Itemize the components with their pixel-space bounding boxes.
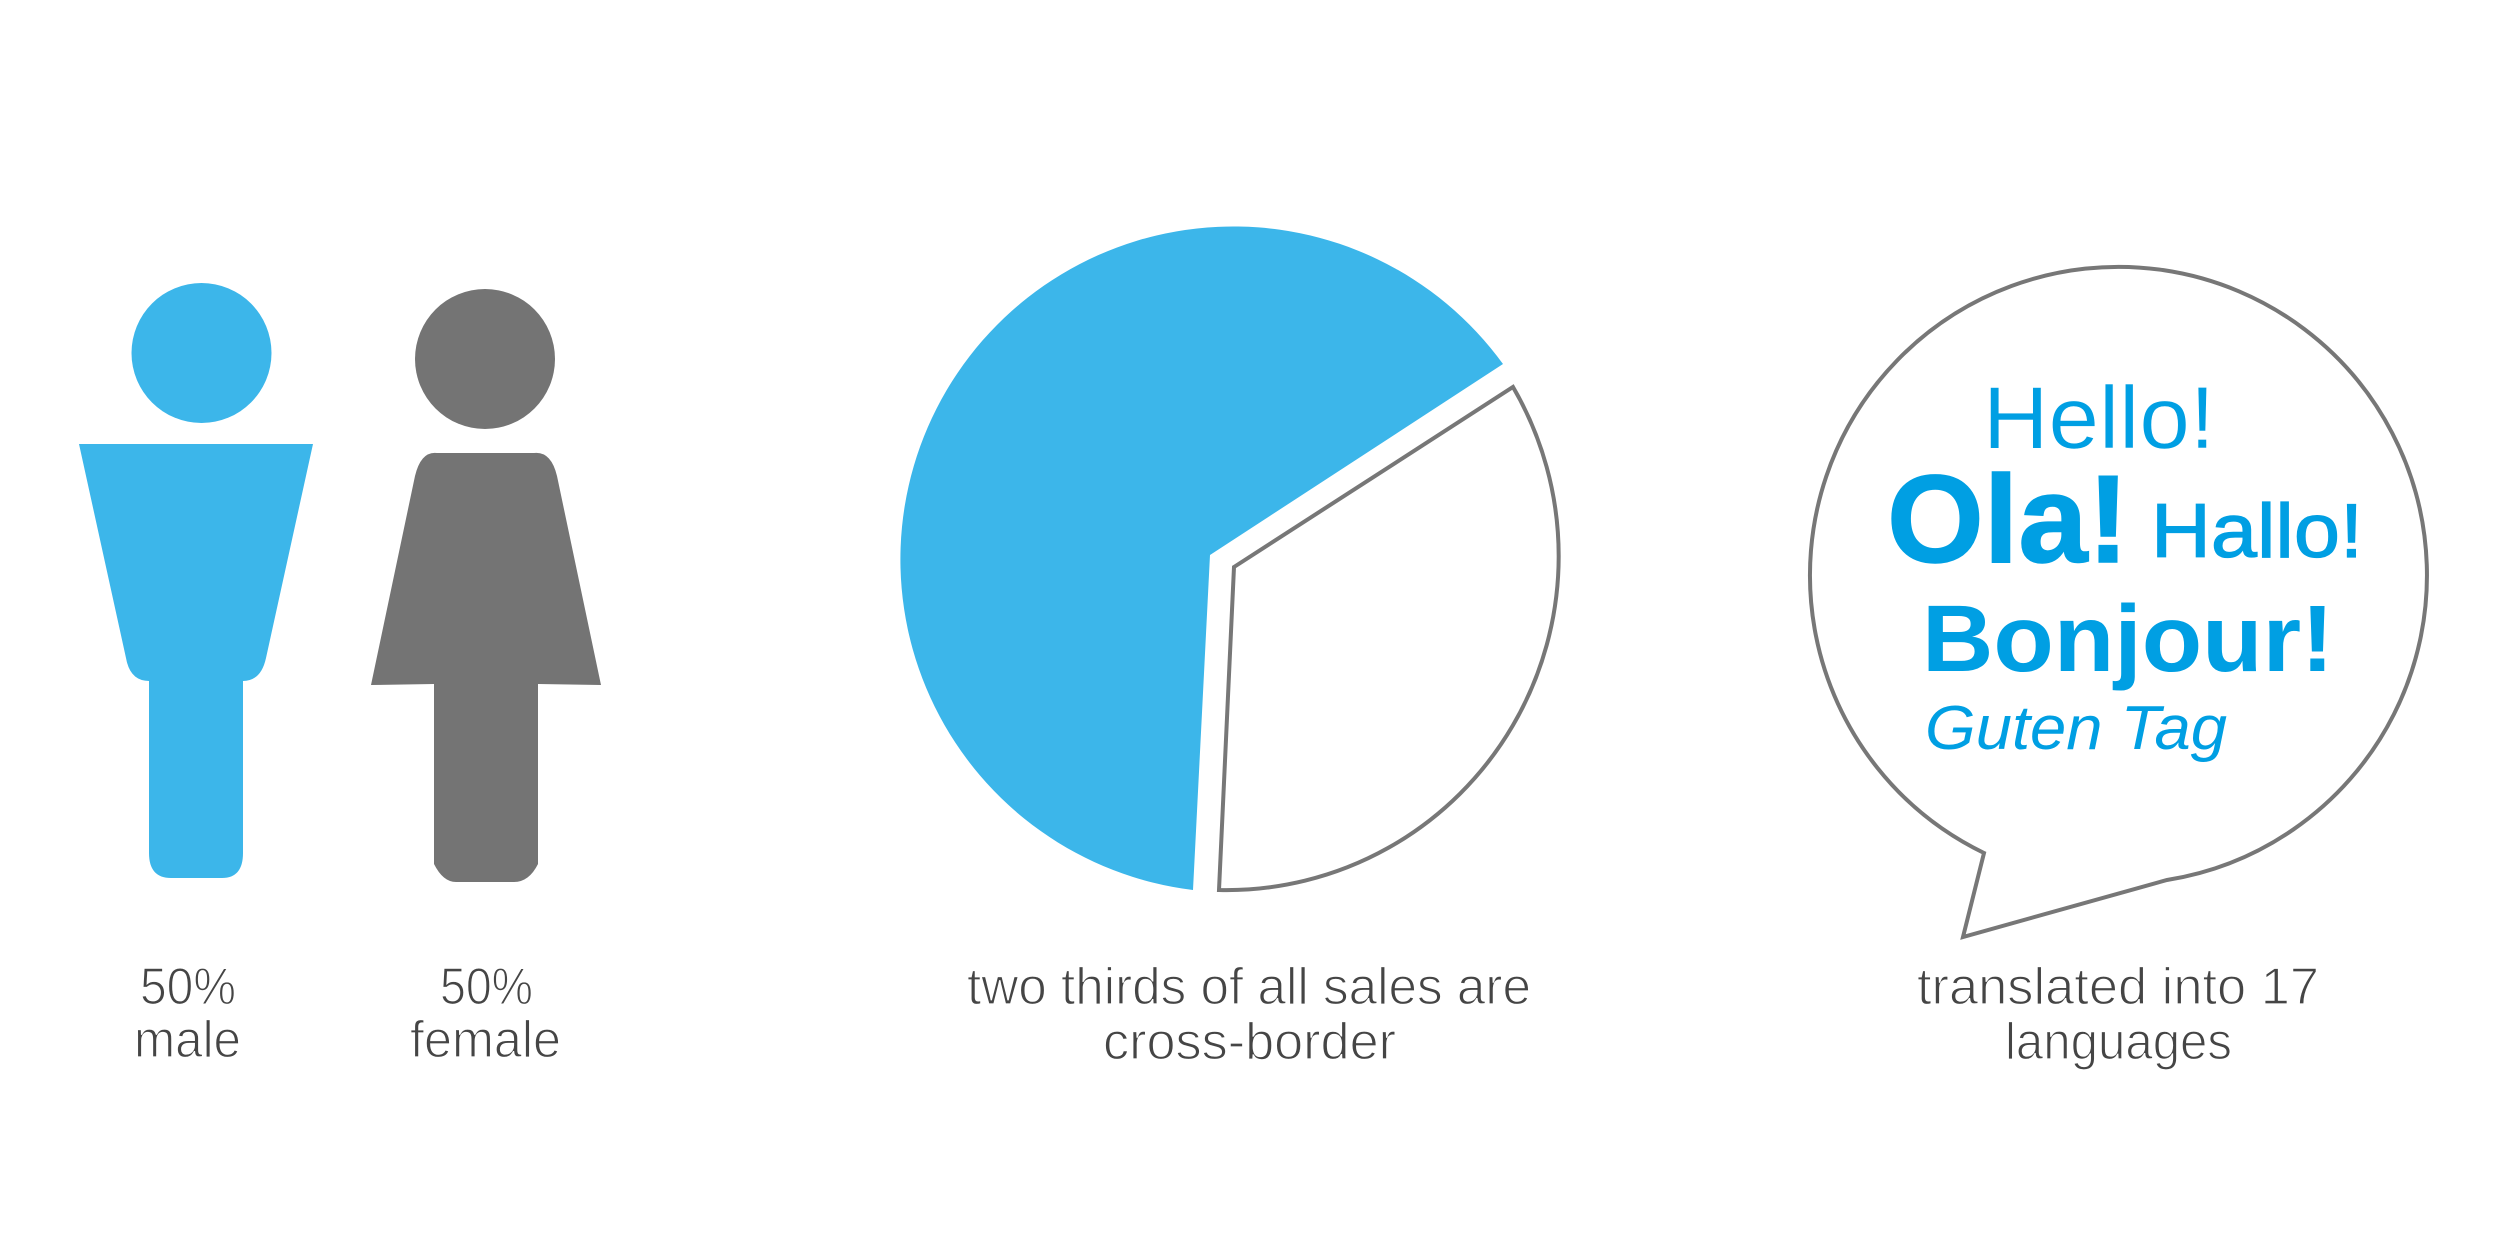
greetings: Hallo! [2151,489,2363,574]
panel: cross-border sales [900,226,1559,1071]
label: translated into 17 languages: translated into 17 [1917,958,2319,1016]
icon: speech bubble [1810,267,2427,937]
label: two thirds of all sales are cross-border: cross-border [1103,1013,1396,1071]
greetings [1887,368,2363,763]
label: 50% male: male [134,1011,241,1069]
label: two thirds of all sales are cross-border: two thirds of all sales are [967,958,1531,1016]
label: translated into 17 languages: languages [2005,1013,2232,1071]
panel: male [79,283,313,1069]
label: two thirds of all sales are cross-border [967,958,1531,1071]
greetings: Hello! [1983,368,2215,467]
label: 50% male: 50% [140,958,236,1016]
panel: female [371,289,601,1069]
label: 50% female: female [410,1011,561,1069]
pie slice: two thirds [900,226,1503,890]
icon: male figure [79,283,313,878]
label: translated into 17 languages [1917,958,2319,1071]
label: 50% male [134,958,241,1069]
label: 50% female [410,958,561,1069]
greetings: Ola! [1887,451,2129,589]
icon: female figure [371,289,601,882]
greetings: Guten Tag [1925,694,2227,763]
chart: pie [900,226,1559,890]
greetings: Bonjour! [1922,586,2334,692]
pie slice: remaining third [1219,387,1559,890]
label: 50% female: 50% [440,958,533,1016]
panel: languages [1810,267,2427,1071]
